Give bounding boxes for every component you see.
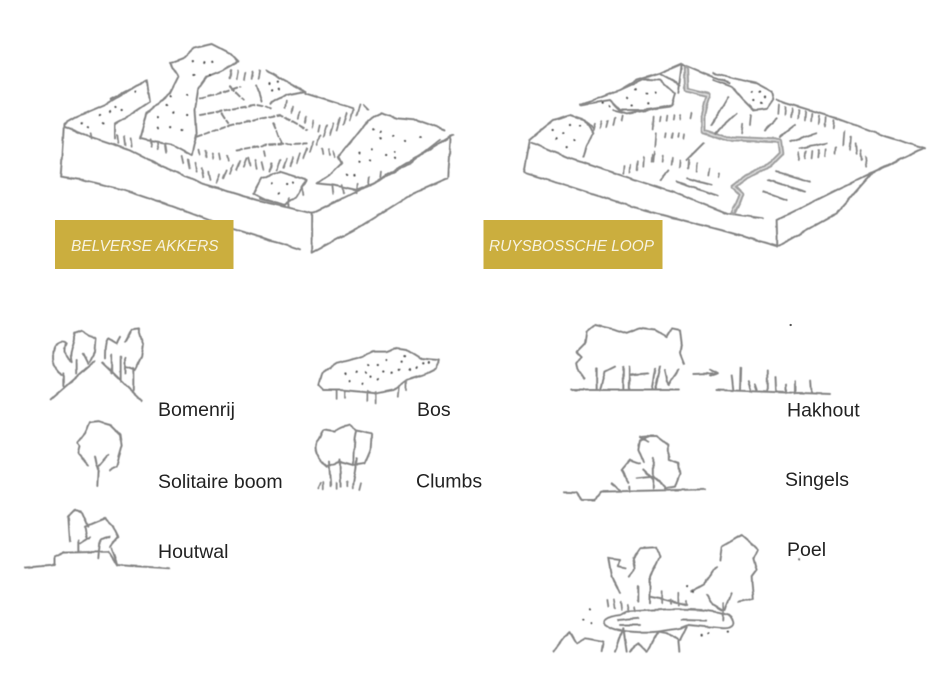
labels: legend text: Houtwal [158, 541, 228, 563]
icon: Clumbs [316, 425, 372, 490]
labels: legend text: Bomenrij [158, 399, 235, 421]
icon: Bos [318, 348, 438, 403]
label: Belverse Akkers: BELVERSE AKKERS [71, 238, 219, 255]
icons, left columns [25, 328, 438, 568]
label: Belverse Akkers [55, 220, 234, 269]
labels: legend text: Bos [417, 399, 451, 421]
labels: legend text: Poel [787, 539, 826, 561]
stray mark [787, 321, 794, 328]
icon: Poel [553, 535, 799, 652]
block diagram: Ruysbossche Loop [524, 64, 925, 247]
icons, right column [553, 325, 830, 652]
labels: legend text [158, 399, 860, 563]
icon: Houtwal [25, 510, 169, 568]
label: Ruysbossche Loop: RUYSBOSSCHE LOOP [489, 238, 655, 255]
labels: legend text: Hakhout [787, 400, 860, 422]
labels: legend text: Singels [785, 469, 849, 491]
icon: Singels [564, 436, 705, 500]
icon: Hakhout [572, 325, 830, 394]
labels: legend text: Solitaire boom [158, 471, 283, 493]
icon: Solitaire boom [77, 422, 122, 486]
block diagram: Belverse Akkers [61, 44, 453, 253]
icon: Bomenrij [51, 328, 143, 401]
label: Ruysbossche Loop [484, 220, 662, 269]
labels: legend text: Clumbs [416, 470, 482, 492]
